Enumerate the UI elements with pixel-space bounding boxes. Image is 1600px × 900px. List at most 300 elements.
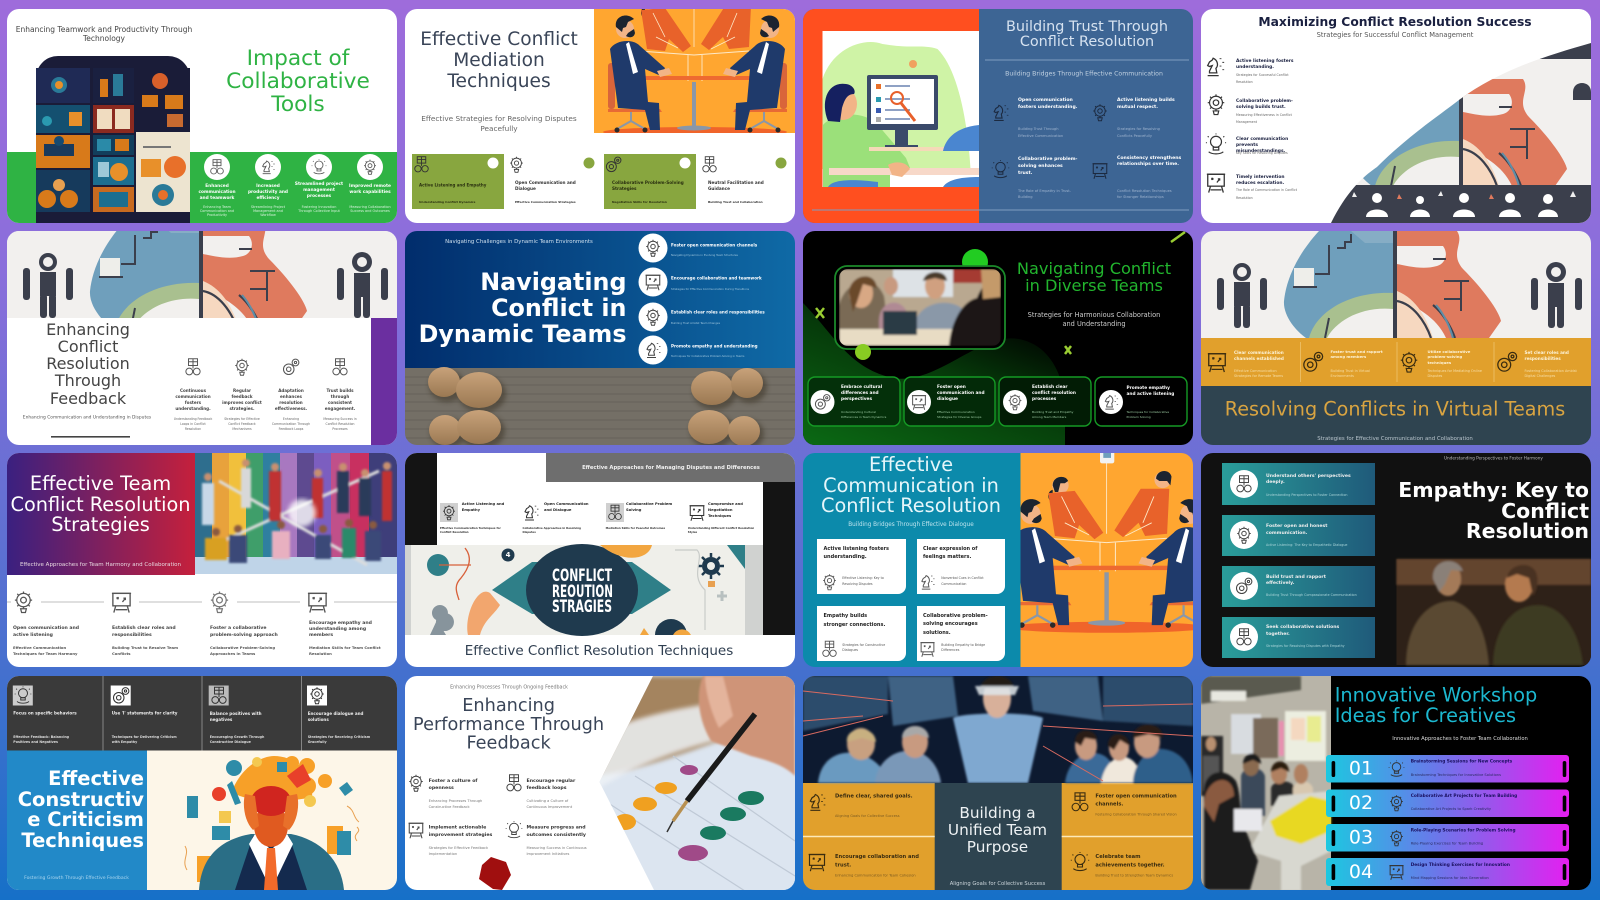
benefit: project management <box>295 154 343 213</box>
subtitle: Technology <box>82 34 126 42</box>
photo: workshop room <box>1200 676 1330 890</box>
point: active listening <box>1093 96 1174 138</box>
point: active listening: Strategies for Resolving <box>1116 127 1159 131</box>
card: active listening: Active Listening and Empathy <box>419 182 487 188</box>
benefit: communication: Communication and <box>200 209 234 213</box>
item: actionable strategies <box>408 823 493 856</box>
benefit: productivity: Increased <box>256 182 280 188</box>
tip: specific behaviors: Focus on specific behaviors <box>13 710 77 715</box>
tip: balance: Balance positives with <box>210 710 262 715</box>
column: adaptation: resolution <box>279 400 303 404</box>
step: collaborative approach: problem-solving approach <box>210 632 278 638</box>
title panel: Constructiv <box>18 787 144 810</box>
item: measure progress: Improvement Initiatives <box>526 852 570 856</box>
item: collaborative problem solving: Collaborative Problem <box>626 502 672 506</box>
step: clear roles <box>112 593 178 656</box>
card: conflict resolution processes: Among Team Members <box>1032 415 1066 419</box>
title: Navigating Conflict <box>1016 258 1171 278</box>
bar 01 <box>1326 754 1568 782</box>
card: open communication: Open Communication and <box>515 180 576 184</box>
panel: Empathy Key to Conflict Resolution <box>1201 453 1591 667</box>
title: Conflict Resolution <box>820 494 1001 516</box>
title: Maximizing Conflict Resolution Success <box>1258 15 1531 29</box>
item: actionable strategies: Implement actionable <box>429 824 486 830</box>
tip: specific behaviors <box>13 685 77 744</box>
poster text: STRAGIES <box>552 597 612 617</box>
item: roles: Set clear roles and <box>1524 350 1568 354</box>
item: open communication <box>522 502 589 534</box>
item: trust and rapport: Foster trust and rapport <box>1330 348 1382 354</box>
point: collaborative problem-solving: solving enhances <box>1018 162 1063 168</box>
step: open communication: Open communication and <box>13 624 79 630</box>
title: Conflict <box>1501 499 1589 523</box>
step: clear roles: Conflicts <box>112 650 131 656</box>
card: collaborative problem solving: Negotiation Skills for Resolution <box>612 200 667 204</box>
illustration: split head art <box>1200 231 1590 338</box>
step: collaborative approach: Collaborative Problem-Solving <box>210 644 275 650</box>
item: clear channels: Strategies for Remote Teams <box>1234 374 1283 378</box>
item: perspectives: Understanding Perspectives to Foster Connection <box>1266 493 1347 497</box>
column: regular feedback: Mechanisms <box>232 427 252 431</box>
item: actionable strategies: Implementation <box>429 852 457 856</box>
panel: Impact of Collaborative Tools <box>7 9 397 223</box>
card: conflict resolution processes: processes <box>1032 396 1056 402</box>
item: collaborative techniques: Techniques for Mediating Online <box>1426 369 1481 373</box>
photo: team with holographic screens <box>802 675 1192 782</box>
item: collaborative solutions: Seek collaborative solutions <box>1266 624 1339 630</box>
card: collaborative problem solving: Collaborative Problem-Solving <box>612 180 684 184</box>
card: cultural differences <box>808 377 900 426</box>
column: trust: Trust builds <box>326 388 354 392</box>
title: Impact of <box>247 46 351 70</box>
panel: Innovative Workshop Ideas for Creatives <box>1201 676 1591 890</box>
tip: I statements: with Empathy <box>112 740 138 744</box>
photo: diverse team with ladders <box>195 453 397 574</box>
title: Resolution <box>1465 519 1588 543</box>
column: regular feedback <box>222 359 262 431</box>
benefit: remote work: work capabilities <box>349 188 391 194</box>
box: collaborative problem-solving: solutions. <box>922 630 950 636</box>
item: clear channels: channels established <box>1234 356 1283 360</box>
bar 03: Role-Playing Scenarios for Problem Solving <box>1410 827 1515 833</box>
item: trust and rapport: Build trust and rapport <box>1266 574 1326 580</box>
item: active listening: Active Listening and <box>462 502 505 506</box>
point: open communication: fosters understanding. <box>1018 104 1077 110</box>
benefit: communication: Productivity <box>207 213 227 217</box>
benefit: productivity: Workflow <box>260 213 276 217</box>
item: clear communication: Key Skills for Resolving Disputes <box>1236 151 1287 155</box>
title: Resolution <box>46 354 130 372</box>
step: empathy: understanding among <box>309 626 366 632</box>
item: open communication: Open Communication <box>544 502 589 506</box>
header bar <box>546 453 795 482</box>
card: cultural differences: Understanding Cultural <box>840 410 876 414</box>
column: regular feedback: improves conflict <box>222 400 262 404</box>
item: clear channels: Clear communication <box>1234 350 1283 354</box>
card: open communication: Foster open <box>936 384 965 390</box>
title: Enhancing <box>462 696 555 716</box>
step: empathy: Resolution <box>309 650 332 656</box>
title: Conflict Resolution <box>1019 34 1154 50</box>
box: empathy: Empathy builds <box>823 613 867 619</box>
item: feedback loops <box>507 774 576 808</box>
point: consistency: for Stronger Relationships <box>1116 195 1163 199</box>
item: collaborative solutions <box>1222 617 1374 658</box>
step: open communication: Techniques for Team Harmony <box>13 650 78 656</box>
column: regular feedback: Conflict Feedback <box>228 422 256 426</box>
item: collaborative solutions: Strategies for Resolving Disputes with Empathy <box>1266 644 1344 648</box>
title: Effective Conflict Resolution Techniques <box>465 643 733 659</box>
item: active listening: Effective Communication Techniques for <box>440 526 501 530</box>
item: open communication: Foster open communication channels <box>671 242 758 248</box>
bar 03: Role-Playing Exercises for Team Building <box>1410 841 1483 845</box>
item: clear communication: prevents <box>1236 142 1258 148</box>
item: measure progress: outcomes consistently <box>526 831 586 837</box>
title: Techniques <box>446 70 551 92</box>
card: empathy: Problem Solving <box>1126 415 1150 419</box>
item: active listening <box>1207 58 1293 84</box>
photo: two men in conversation <box>1396 559 1590 665</box>
item: compromise: Understanding Different Conflict Resolution <box>688 526 754 530</box>
item: active listening: Active listening fosters <box>1236 58 1293 64</box>
decorative red hexagon <box>479 856 511 890</box>
item: open communication: Navigating Dynamics in Evolving Team Structures <box>671 253 739 257</box>
benefit: communication: Enhanced <box>205 182 229 188</box>
item: openness: Constructive Feedback <box>429 804 471 808</box>
column: trust: Conflict Resolution <box>326 422 354 426</box>
column: continuous communication: understanding. <box>175 406 211 410</box>
step: collaborative approach <box>210 591 278 656</box>
subtitle: Understanding Perspectives to Foster Harmony <box>1443 456 1543 460</box>
card: neutral facilitation: Guidance <box>708 186 730 190</box>
item: compromise <box>688 502 754 534</box>
item: collaborative solutions: together. <box>1266 630 1289 636</box>
benefit: communication: and teamwork <box>200 194 235 200</box>
subtitle: Building Bridges Through Effective Dialogue <box>848 522 974 528</box>
subtitle: Building Bridges Through Effective Communication <box>1005 70 1162 78</box>
subtitle: Enhancing Communication and Understanding in Disputes <box>23 414 152 420</box>
item: open channels: Foster open communication <box>1095 793 1177 799</box>
title: Through <box>54 370 121 390</box>
bar 01: 01 <box>1348 757 1373 779</box>
bar 01: Brainstorming Techniques for Innovative Solutions <box>1410 772 1501 776</box>
box: collaborative problem-solving: Building Empathy to Bridge <box>941 643 985 647</box>
panel: Building a Unified Team Purpose <box>803 676 1193 890</box>
item: trust and rapport: Building Trust Through Compassionate Communication <box>1266 593 1356 597</box>
title: Feedback <box>466 733 551 753</box>
box: clear expression <box>916 539 1004 594</box>
point: collaborative problem-solving: Collaborative problem- <box>1018 156 1077 162</box>
item: trust and rapport: effectively. <box>1266 580 1294 586</box>
point: consistency: relationships over time. <box>1116 160 1179 166</box>
item: open communication <box>638 234 758 262</box>
subtitle: Strategies for Harmonious Collaboration <box>1027 311 1160 319</box>
column: continuous communication: Resolution <box>185 427 201 431</box>
item: shared goals: Define clear, shared goals. <box>834 793 912 799</box>
column: adaptation: Feedback Loops <box>279 427 304 431</box>
title panel: Fostering Growth Through Effective Feedback <box>24 874 129 880</box>
column: trust: consistent <box>328 400 352 404</box>
point: active listening: Conflicts Peacefully <box>1116 134 1152 138</box>
item: compromise: Compromise and <box>708 502 743 506</box>
card: open communication <box>904 377 994 426</box>
title: Dynamic Teams <box>419 320 626 348</box>
item: empathy: Promote empathy and understanding <box>671 344 758 348</box>
item: collaborative problem solving: Mediation Skills for Peaceful Outcomes <box>606 526 665 530</box>
item: open channels: channels. <box>1095 801 1123 807</box>
card: open communication: Effective Communication <box>936 410 974 414</box>
title: Tools <box>270 92 325 116</box>
item: collaboration <box>638 268 762 296</box>
step: empathy: members <box>309 632 333 638</box>
point: open communication: Open communication <box>1018 96 1072 102</box>
illustration: split head art in arc <box>1331 43 1591 223</box>
benefit: productivity <box>248 154 288 217</box>
illustration: mediation meeting <box>594 9 795 133</box>
benefit: communication <box>198 154 236 217</box>
box: empathy: Strategies for Constructive <box>842 643 885 647</box>
item: perspectives: deeply. <box>1266 478 1284 484</box>
title panel: Techniques <box>21 828 144 851</box>
benefit: project management: processes <box>307 192 332 198</box>
title: in Diverse Teams <box>1025 276 1162 294</box>
card: conflict resolution processes: Building Trust and Empathy <box>1032 410 1073 414</box>
card: empathy: Promote empathy <box>1126 384 1170 390</box>
item: open communication: Disputes <box>522 530 536 534</box>
bar 04: Mind Mapping Sessions for Idea Generation <box>1410 876 1488 880</box>
box: active listening: Effective Listening: Key to <box>842 576 883 580</box>
card: conflict resolution processes: conflict resolution <box>1032 390 1075 396</box>
subtitle: Enhancing Processes Through Ongoing Feedback <box>450 684 568 690</box>
poster text: REOUTION <box>552 582 613 602</box>
title panel <box>7 750 147 890</box>
item: openness: openness <box>429 785 454 790</box>
card: cultural differences: Differences in Team Dynamics <box>840 415 886 419</box>
item: collaborative problem-solving: Management <box>1236 120 1257 124</box>
item: roles: Building Trust Amidst Team Changes <box>671 321 721 325</box>
item: collaborative techniques: problem-solving <box>1427 354 1462 358</box>
card: empathy <box>1094 377 1186 426</box>
item: collaboration and trust <box>808 854 919 877</box>
card: active listening <box>412 154 504 209</box>
title: Navigating <box>480 268 626 296</box>
item: roles: Digital Challenges <box>1524 374 1555 378</box>
panel: Resolving Conflicts in Virtual Teams <box>1201 231 1591 445</box>
title: Conflict Resolution <box>10 492 191 516</box>
decorative circle: bottom <box>854 344 870 360</box>
tip: dialogue: solutions <box>308 716 329 721</box>
title: Resolving Conflicts in Virtual Teams <box>1224 398 1565 420</box>
title: Mediation <box>453 50 545 70</box>
title: Building a <box>959 804 1035 822</box>
title panel: Effective <box>48 766 144 789</box>
illustration: overwhelmed man <box>185 756 359 890</box>
item: roles <box>638 302 765 332</box>
item: roles: Fostering Collaboration Amidst <box>1524 369 1577 373</box>
graphic: conflict resolution strategies poster <box>405 544 763 636</box>
panel: Effective Conflict Mediation Techniques <box>405 9 795 223</box>
step: clear roles: Establish clear roles and <box>112 624 176 630</box>
item: celebrate <box>1070 852 1173 877</box>
point: collaborative problem-solving <box>991 156 1077 199</box>
point: open communication: Effective Communication <box>1018 134 1063 138</box>
item: openness: Foster a culture of <box>429 777 478 783</box>
tip: balance: Encouraging Growth Through <box>210 734 265 738</box>
title: Empathy: Key to <box>1398 478 1588 502</box>
box: clear expression: Communication <box>941 582 966 586</box>
tip: balance: Constructive Dialogue <box>210 740 252 744</box>
item: collaborative problem-solving <box>1207 94 1292 124</box>
illustration: mediator meeting <box>1020 453 1193 667</box>
title: Effective Team <box>30 472 171 494</box>
column: continuous communication: Continuous <box>180 388 207 392</box>
column: adaptation: Communication Through <box>272 422 310 426</box>
tip: I statements <box>111 685 178 744</box>
benefit: remote work: Measuring Collaboration <box>349 205 391 209</box>
tip: dialogue: Encourage dialogue and <box>308 710 364 715</box>
point: collaborative problem-solving: The Role of Empathy in Trust- <box>1016 189 1071 193</box>
box: collaborative problem-solving: Differences <box>941 648 959 652</box>
item: collaboration and trust: trust. <box>834 862 851 868</box>
point: consistency: Consistency strengthens <box>1116 154 1181 160</box>
tip: balance: negatives <box>210 716 233 721</box>
card: cultural differences: differences and <box>840 390 878 396</box>
benefit: project management: management <box>303 186 335 192</box>
column: adaptation: Adaptation <box>278 388 304 392</box>
title: Effective Conflict <box>420 28 578 50</box>
item: compromise: Techniques <box>708 514 732 518</box>
item: collaboration: Strategies for Effective Communication During Transitions <box>671 287 750 291</box>
bar 04: 04 <box>1348 860 1373 882</box>
item: openness: Enhancing Processes Through <box>429 798 482 802</box>
title: Effective <box>868 453 953 476</box>
illustration: review at monitor <box>822 31 978 187</box>
box: clear expression: Nonverbal Cues in Conflict <box>941 576 984 580</box>
panel: Effective Team Conflict Resolution Strategies <box>7 453 397 667</box>
item: open communication <box>1222 515 1374 556</box>
item: collaborative techniques: Disputes <box>1427 374 1442 378</box>
illustration: split head art <box>7 231 397 318</box>
bar 02: Collaborative Art Projects for Team Building <box>1410 792 1517 798</box>
item: active listening: Strategies for Successful Conflict <box>1236 73 1289 77</box>
tip: dialogue: Strategies for Receiving Criticism <box>308 734 371 738</box>
item: perspectives <box>1222 463 1374 505</box>
item: celebrate: achievements together. <box>1095 862 1164 868</box>
point: open communication: Building Trust Through <box>1018 127 1058 131</box>
item: open communication: and Dialogue <box>544 508 572 512</box>
item: feedback loops: feedback loops <box>526 784 567 790</box>
step: clear roles: Building Trust to Resolve Team <box>112 644 178 650</box>
item: clear channels: Effective Communication <box>1234 369 1276 373</box>
item: open channels: Fostering Collaboration Through Shared Vision <box>1095 812 1176 816</box>
poster text: CONFLICT <box>552 566 612 586</box>
tip: I statements: Techniques for Delivering Criticism <box>112 734 177 738</box>
panel: Maximizing Conflict Resolution Success <box>1201 9 1591 223</box>
title: Enhancing <box>46 320 130 338</box>
item: active listening <box>440 502 505 534</box>
title: Conflict <box>58 336 118 356</box>
tip: I statements: Use 'I' statements for clarity <box>112 710 178 715</box>
graphic: conflict resolution strategies poster: 4 <box>506 551 511 559</box>
item: timely intervention: reduces escalation. <box>1236 180 1284 186</box>
panel: Navigating Conflict in Diverse Teams <box>803 231 1193 445</box>
tip: specific behaviors: Effective Feedback: Balancing <box>13 734 70 738</box>
column: adaptation: effectiveness. <box>275 406 308 410</box>
card: open communication: Effective Communication Strategies <box>515 200 576 204</box>
card: empathy: Techniques for Collaborative <box>1125 410 1169 414</box>
column: adaptation: Enhancing <box>283 417 299 421</box>
box: empathy <box>816 606 906 661</box>
benefit: remote work <box>349 154 391 213</box>
bar 02 <box>1326 789 1568 816</box>
panel: Effective Constructive Criticism Techniques <box>7 676 397 890</box>
column: adaptation <box>272 359 310 431</box>
box: active listening: Active listening fosters <box>823 546 888 552</box>
card: conflict resolution processes: Establish clear <box>1032 384 1068 390</box>
step: empathy: Encourage empathy and <box>309 620 372 626</box>
item: collaboration: Encourage collaboration and teamwork <box>671 276 762 280</box>
item: collaboration and trust: Enhancing Communication for Team Cohesion <box>834 873 915 877</box>
card: neutral facilitation: Neutral Facilitation and <box>708 180 764 184</box>
subtitle: Navigating Challenges in Dynamic Team Environments <box>445 239 593 245</box>
point: consistency: Conflict Resolution Techniques <box>1116 189 1171 193</box>
column: regular feedback: Strategies for Effective <box>224 417 260 421</box>
card: collaborative problem solving: Strategies <box>612 186 637 190</box>
benefit: remote work: Success and Outcomes <box>350 209 390 213</box>
step: open communication: active listening <box>13 632 53 638</box>
tip: dialogue <box>307 685 371 744</box>
step: open communication: Effective Communication <box>13 644 67 650</box>
step: collaborative approach: Foster a collaborative <box>210 624 267 630</box>
column: regular feedback: strategies. <box>229 406 255 410</box>
item: collaboration and trust: Encourage collaboration and <box>834 854 919 860</box>
item: collaborative techniques: techniques <box>1427 360 1451 364</box>
title: Purpose <box>966 838 1028 856</box>
item: compromise: Negotiation <box>708 508 733 512</box>
illustration: collaboration tiles <box>36 56 190 223</box>
subtitle: Enhancing Teamwork and Productivity Through <box>16 24 192 34</box>
item: roles: Establish clear roles and responsibilities <box>671 310 765 314</box>
column: continuous communication: Understanding Feedback <box>174 417 212 421</box>
item: roles <box>1497 350 1577 378</box>
point: active listening: Active listening builds <box>1116 96 1174 102</box>
item: open communication: communication. <box>1266 530 1307 536</box>
card: open communication <box>508 154 600 209</box>
column: trust <box>323 359 357 431</box>
column: continuous communication: Loops in Conflict <box>180 422 207 426</box>
photo: wood pieces on slate <box>405 367 795 449</box>
card: active listening: Understanding Conflict Dynamics <box>419 200 476 204</box>
step: open communication <box>13 591 79 656</box>
benefit: productivity: Management and <box>253 209 283 213</box>
benefit: communication: Enhancing Team <box>203 205 232 209</box>
title: Conflict in <box>491 294 626 322</box>
benefit: project management: Through Collective Input <box>297 209 340 213</box>
point: open communication <box>994 96 1077 138</box>
column: regular feedback: feedback <box>231 394 253 398</box>
title panel: e Criticism <box>27 807 144 830</box>
bar 02: Collaborative Art Projects to Spark Creativity <box>1410 806 1491 810</box>
item: trust and rapport <box>1222 566 1374 607</box>
box: active listening <box>816 539 906 594</box>
step: empathy <box>308 593 381 656</box>
subtitle: Innovative Approaches to Foster Team Collaboration <box>1392 736 1527 742</box>
card: collaborative problem solving <box>604 154 696 209</box>
item: collaborative problem solving <box>606 502 672 530</box>
item: compromise: Styles <box>688 530 698 534</box>
header bar: Effective Approaches for Managing Disputes and Differences <box>582 465 760 471</box>
column: trust: Measuring Success in <box>323 417 357 421</box>
